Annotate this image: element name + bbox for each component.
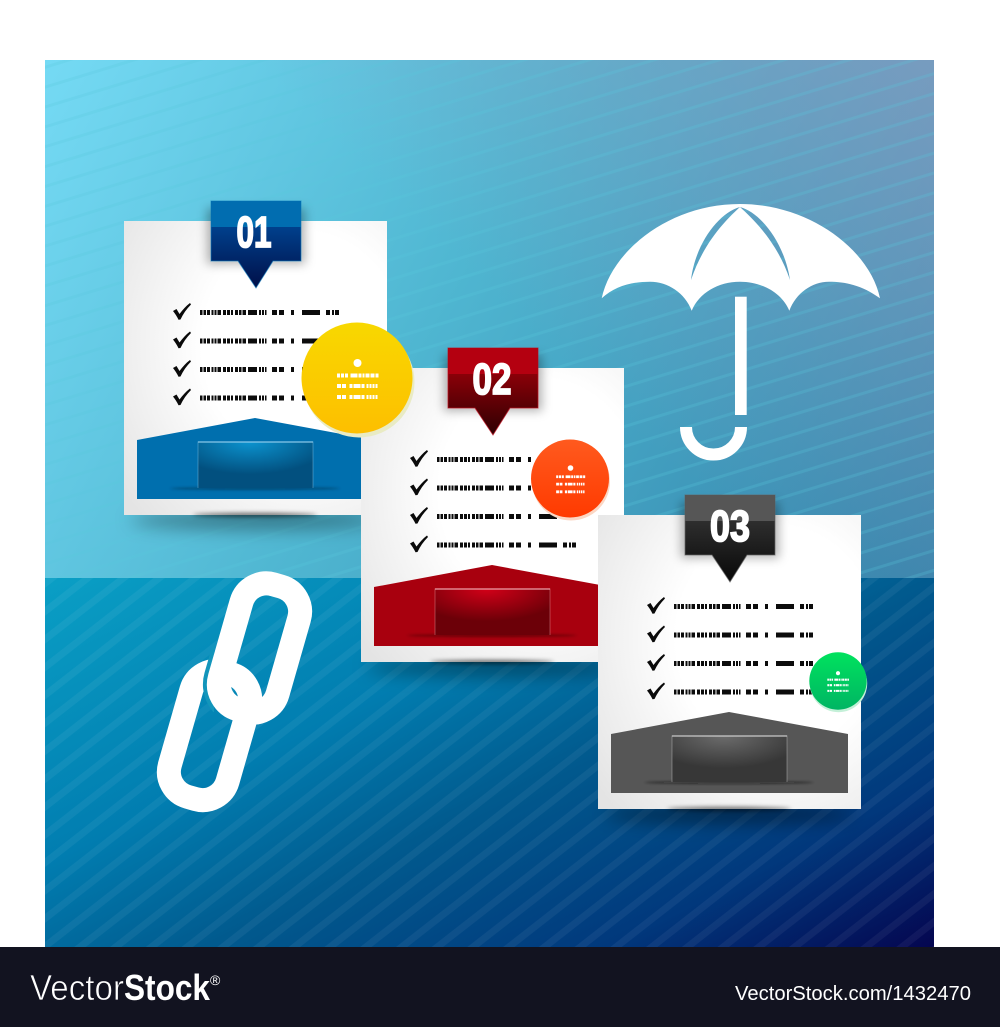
card 3 checklist <box>647 597 813 699</box>
yellow badge <box>302 322 414 438</box>
registered mark: ® <box>210 972 221 988</box>
icon: chain link <box>163 577 306 806</box>
footer bar <box>0 947 1000 1027</box>
card 1 shadow <box>130 512 380 528</box>
card 3 shadow <box>604 806 854 822</box>
card 3 house banner <box>611 712 848 793</box>
logo wordmark: Vector <box>30 967 124 1008</box>
card 2 <box>361 348 624 675</box>
stock id: VectorStock.com/1432470 <box>735 983 971 1005</box>
card 3 sheet <box>598 515 861 809</box>
number 02: 02 <box>472 355 512 404</box>
number 03: 03 <box>710 502 750 551</box>
card 2 checklist <box>410 450 576 552</box>
background panel <box>45 60 934 947</box>
card 2 tag shadow <box>444 355 542 411</box>
card 3 number tag <box>685 495 775 582</box>
orange badge <box>531 440 610 520</box>
card 1 checklist <box>173 303 339 405</box>
card 3 <box>598 495 861 822</box>
icon: umbrella <box>602 204 880 454</box>
card 3 tag shadow <box>681 502 779 558</box>
card 1 sheet <box>124 221 387 515</box>
card 2 shadow <box>367 659 617 675</box>
green badge <box>809 652 867 712</box>
number 01: 01 <box>236 208 272 257</box>
card 2 house banner <box>374 565 611 646</box>
card 1 number tag <box>211 201 301 288</box>
card 1 <box>124 201 387 528</box>
card 1 tag shadow <box>207 208 305 264</box>
card 1 house banner <box>137 418 374 499</box>
card 2 number tag <box>448 348 538 435</box>
card 2 sheet <box>361 368 624 662</box>
logo wordmark bold: Stock <box>124 967 211 1008</box>
